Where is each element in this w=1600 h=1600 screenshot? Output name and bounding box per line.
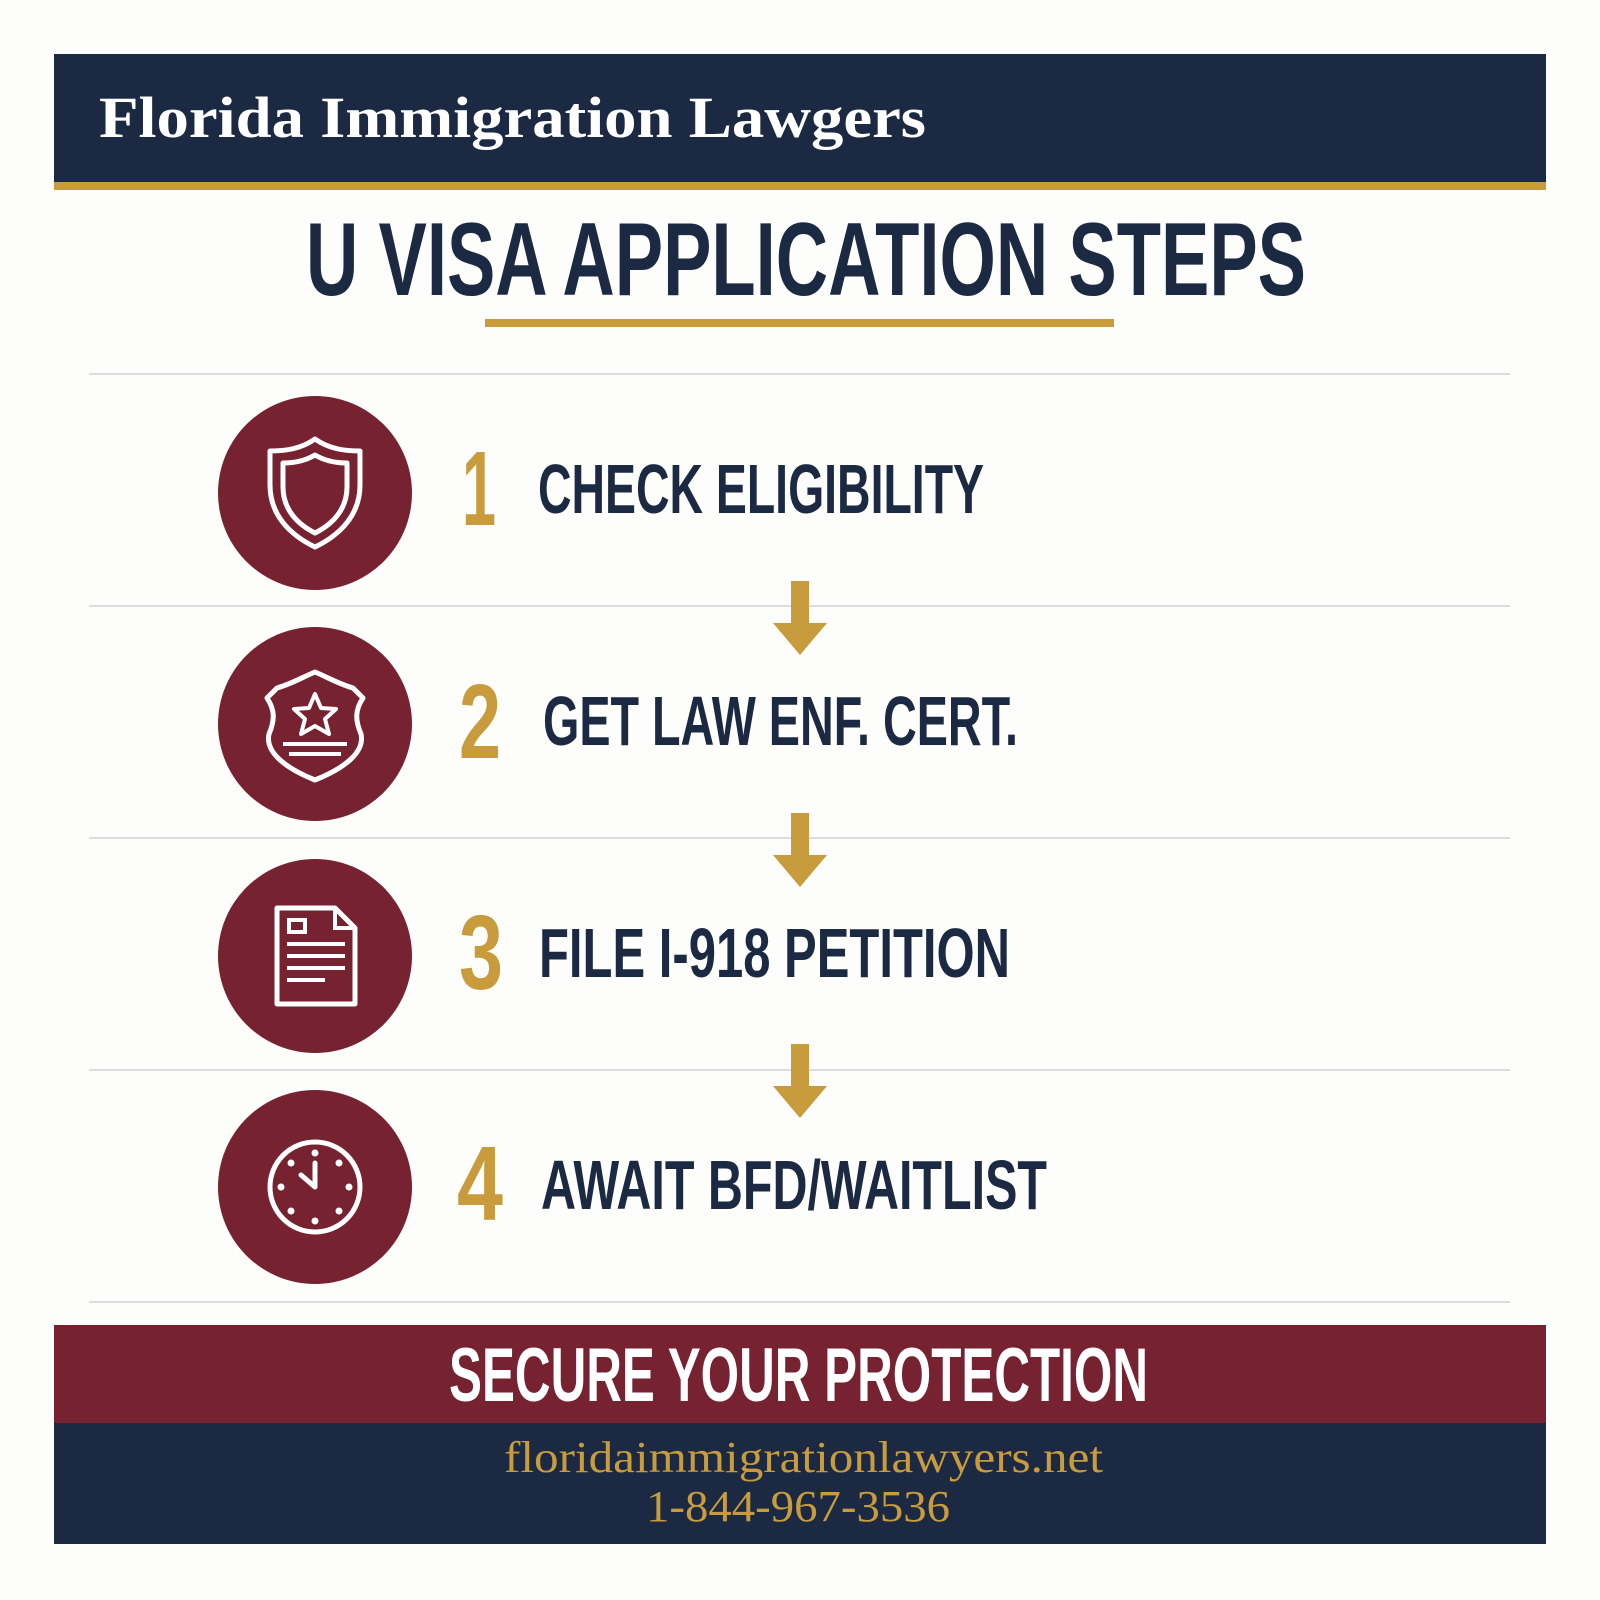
step 3: 3 [459, 894, 503, 1012]
header bar [54, 54, 1546, 190]
footer: contact: 1-844-967-3536 [646, 1482, 950, 1531]
step 2: GET LAW ENF. CERT. [543, 682, 1018, 760]
header brand text: Florida Immigration Lawgers [99, 85, 926, 150]
step 3: FILE I-918 PETITION [539, 914, 1010, 992]
step 2 [218, 627, 1018, 821]
icon: document [218, 859, 412, 1053]
step 3 [218, 859, 1010, 1053]
arrow 3 [773, 1044, 827, 1118]
footer: contact: floridaimmigrationlawyers.net [504, 1433, 1103, 1482]
title underline [485, 319, 1114, 327]
footer: contact [54, 1423, 1546, 1544]
footer: call to action [54, 1325, 1546, 1423]
arrow 2 [773, 813, 827, 887]
step 2: 2 [459, 663, 501, 781]
icon: clock [218, 1090, 412, 1284]
footer: call to action: SECURE YOUR PROTECTION [449, 1333, 1148, 1418]
step 1: CHECK ELIGIBILITY [538, 450, 984, 528]
icon: police badge [218, 627, 412, 821]
step 4: 4 [457, 1125, 503, 1243]
arrow 1 [773, 581, 827, 655]
step 4 [218, 1090, 1047, 1284]
step 1 [218, 396, 984, 590]
step 4: AWAIT BFD/WAITLIST [541, 1146, 1047, 1224]
step 1: 1 [462, 430, 496, 548]
icon: shield [218, 396, 412, 590]
